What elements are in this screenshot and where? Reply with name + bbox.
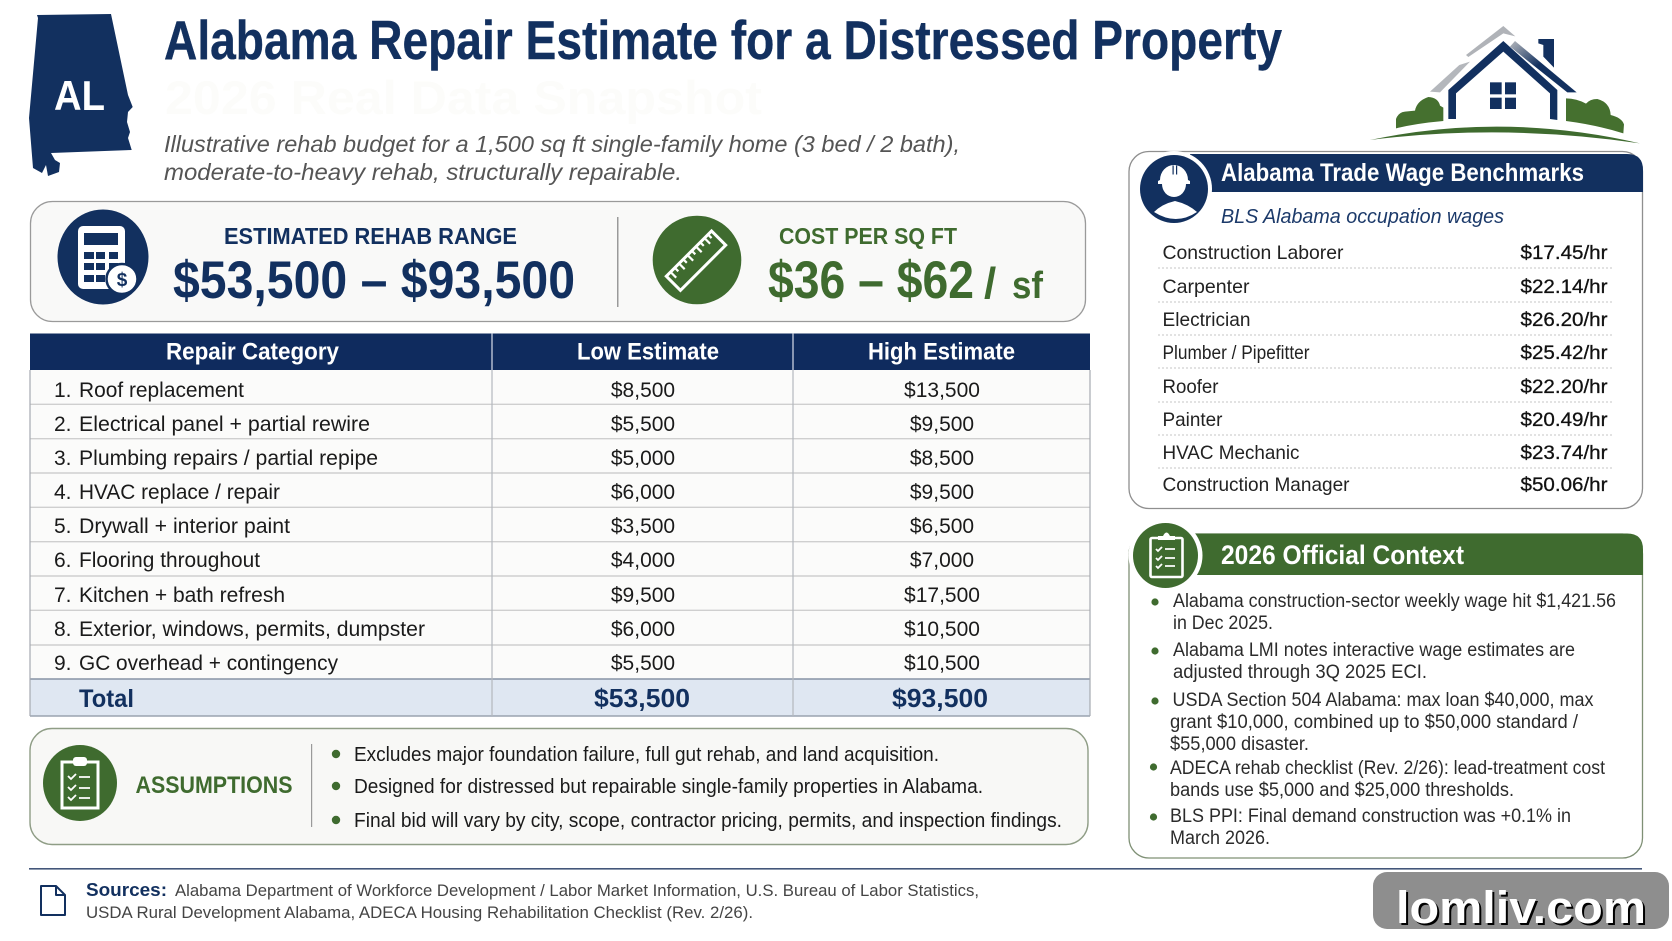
- assumptions list: Excludes major foundation failure, full gut rehab, and land acquisition.: [354, 744, 939, 766]
- watermark: lomliv.com: [1396, 882, 1646, 933]
- row 8: $6,000: [611, 618, 675, 641]
- row 4: HVAC replace / repair: [79, 481, 280, 504]
- icon: document: [41, 886, 65, 915]
- bullet: USDA: grant $10,000, combined up to $50,000 standard /: [1170, 712, 1579, 733]
- sources: USDA Rural Development Alabama, ADECA Housing Rehabilitation Checklist (Rev. 2/26).: [86, 903, 753, 922]
- wage: roofer: Roofer: [1162, 376, 1219, 398]
- wage: painter: [1162, 409, 1608, 431]
- row 3: $8,500: [910, 447, 974, 470]
- cost per sq ft value: sf: [1012, 265, 1043, 307]
- row 5: Drywall + interior paint: [79, 515, 290, 538]
- wage panel header: [1190, 154, 1643, 192]
- row 5: [54, 515, 974, 538]
- wage: plumber: Plumber / Pipefitter: [1162, 342, 1310, 364]
- assumptions list: [332, 744, 1062, 832]
- bullet: PPI: BLS PPI: Final demand construction was +0.1% in: [1170, 806, 1571, 827]
- cost per sq ft value: $36 – $62: [768, 251, 974, 310]
- wage: electrician: $26.20/hr: [1520, 309, 1608, 331]
- wage: HVAC mechanic: HVAC Mechanic: [1162, 442, 1300, 464]
- bullet: USDA: $55,000 disaster.: [1170, 734, 1309, 755]
- row 5: $6,500: [910, 515, 974, 538]
- wage: roofer: $22.20/hr: [1520, 376, 1608, 398]
- cost per sq ft label: COST PER SQ FT: [779, 223, 957, 249]
- wage: construction laborer: $17.45/hr: [1520, 242, 1608, 264]
- row 2: Electrical panel + partial rewire: [79, 413, 370, 436]
- wage: construction laborer: [1162, 242, 1608, 264]
- row 8: [54, 618, 980, 641]
- row 7: 7.: [54, 584, 72, 607]
- table header: High Estimate: [868, 338, 1015, 366]
- row 9: $10,500: [904, 652, 980, 675]
- row 9: GC overhead + contingency: [79, 652, 338, 675]
- wage: HVAC mechanic: $23.74/hr: [1520, 442, 1608, 464]
- total row: $53,500: [594, 683, 690, 713]
- row 1: $8,500: [611, 379, 675, 402]
- panel: Alabama trade wage benchmarks: [1129, 151, 1643, 508]
- bullet: ADECA: ADECA rehab checklist (Rev. 2/26): lead-treatment cost: [1170, 758, 1606, 779]
- wage: construction laborer: Construction Laborer: [1162, 242, 1344, 264]
- total row: $93,500: [892, 683, 988, 713]
- title: Alabama Repair Estimate for a Distressed Property: [164, 9, 1282, 71]
- bullet: ADECA: bands use $5,000 and $25,000 thresholds.: [1170, 780, 1514, 801]
- wage: plumber: [1162, 342, 1608, 364]
- row 3: 3.: [54, 447, 72, 470]
- icon: Alabama state silhouette with AL: [29, 14, 133, 176]
- table header: [30, 333, 1090, 370]
- row 7: $17,500: [904, 584, 980, 607]
- wage: electrician: [1162, 309, 1608, 331]
- wage: painter: Painter: [1162, 409, 1223, 431]
- bullet: weekly wage: in Dec 2025.: [1173, 613, 1273, 634]
- row 1: 1.: [54, 379, 72, 402]
- row 2: [54, 413, 974, 436]
- wage: carpenter: $22.14/hr: [1520, 276, 1608, 298]
- assumptions list: Designed for distressed but repairable single-family properties in Alabama.: [354, 776, 983, 798]
- icon: worker: [1136, 151, 1212, 227]
- row 1: [54, 379, 980, 402]
- wage: construction manager: Construction Manager: [1162, 474, 1350, 496]
- row 6: $7,000: [910, 549, 974, 572]
- row 7: [54, 584, 980, 607]
- faint subtitle: 2026 Real Data Snapshot: [165, 71, 762, 124]
- intro text: [164, 131, 960, 185]
- wage: roofer: [1162, 376, 1608, 398]
- row 6: Flooring throughout: [79, 549, 260, 572]
- row 4: 4.: [54, 481, 72, 504]
- range value: $53,500 – $93,500: [173, 251, 575, 310]
- wage: carpenter: [1162, 276, 1608, 298]
- row 2: $9,500: [910, 413, 974, 436]
- table header: Repair Category: [166, 338, 340, 366]
- watermark: [1373, 872, 1669, 933]
- row 2: 2.: [54, 413, 72, 436]
- wage: HVAC mechanic: [1162, 442, 1608, 464]
- wage: electrician: Electrician: [1162, 309, 1250, 331]
- wage: plumber: $25.42/hr: [1520, 342, 1608, 364]
- panel: estimated rehab range and cost per sq ft: [30, 202, 1086, 322]
- row 7: Kitchen + bath refresh: [79, 584, 285, 607]
- total row: Total: [79, 685, 134, 713]
- wage panel subtitle: BLS Alabama occupation wages: [1221, 206, 1504, 228]
- icon: house logo: [1370, 26, 1640, 143]
- row 6: $4,000: [611, 549, 675, 572]
- assumptions list: Final bid will vary by city, scope, contractor pricing, permits, and inspection findings.: [354, 810, 1062, 832]
- bullet: PPI: March 2026.: [1170, 828, 1270, 849]
- total row: [79, 683, 988, 713]
- row 4: [54, 481, 974, 504]
- context panel header: 2026 Official Context: [1221, 540, 1464, 570]
- icon: calculator: [58, 210, 148, 304]
- row 9: $5,500: [611, 652, 675, 675]
- row 5: $3,500: [611, 515, 675, 538]
- row 1: Roof replacement: [79, 379, 244, 402]
- panel: assumptions: [30, 728, 1088, 844]
- wage: carpenter: Carpenter: [1162, 276, 1250, 298]
- row 4: $6,000: [611, 481, 675, 504]
- row 1: $13,500: [904, 379, 980, 402]
- row 8: Exterior, windows, permits, dumpster: [79, 618, 425, 641]
- row 6: 6.: [54, 549, 72, 572]
- row 8: $10,500: [904, 618, 980, 641]
- wage: construction manager: [1162, 474, 1608, 496]
- row 9: 9.: [54, 652, 72, 675]
- bullet: USDA: [1151, 690, 1594, 755]
- icon: ruler: [653, 216, 741, 304]
- range label: ESTIMATED REHAB RANGE: [224, 223, 517, 249]
- row 7: $9,500: [611, 584, 675, 607]
- icon: assumptions clipboard: [43, 745, 117, 821]
- row 2: $5,500: [611, 413, 675, 436]
- bullet: LMI: adjusted through 3Q 2025 ECI.: [1173, 662, 1427, 683]
- assumptions heading: ASSUMPTIONS: [136, 772, 292, 799]
- table header: Low Estimate: [577, 338, 719, 366]
- row 8: 8.: [54, 618, 72, 641]
- row 3: $5,000: [611, 447, 675, 470]
- panel: 2026 official context: [1128, 518, 1643, 858]
- row 4: $9,500: [910, 481, 974, 504]
- sources: Sources:: [86, 880, 167, 900]
- row 3: Plumbing repairs / partial repipe: [79, 447, 378, 470]
- intro text: Illustrative rehab budget for a 1,500 sq ft single-family home (3 bed / 2 bath),: [164, 131, 960, 157]
- bullet: weekly wage: [1151, 591, 1616, 634]
- sources: [86, 880, 979, 922]
- intro text: moderate-to-heavy rehab, structurally repairable.: [164, 159, 682, 185]
- icon: context clipboard: [1128, 518, 1202, 592]
- cost per sq ft value: /: [984, 259, 996, 308]
- wage: painter: $20.49/hr: [1520, 409, 1608, 431]
- icon: Alabama state silhouette with AL: AL: [54, 72, 105, 119]
- wage panel header: Alabama Trade Wage Benchmarks: [1221, 159, 1584, 187]
- bullet: ADECA: [1150, 758, 1606, 801]
- context panel header: [1190, 534, 1643, 575]
- row 9: [54, 652, 980, 675]
- row 6: [54, 549, 974, 572]
- bullet: USDA: USDA Section 504 Alabama: max loan $40,000, max: [1172, 690, 1594, 711]
- bullet: LMI: [1151, 640, 1575, 683]
- row 5: 5.: [54, 515, 72, 538]
- bullet: weekly wage: Alabama construction-sector weekly wage hit $1,421.56: [1173, 591, 1616, 612]
- sources: Alabama Department of Workforce Development / Labor Market Information, U.S. Bureau of Labor Statistics,: [175, 881, 979, 900]
- bullet: PPI: [1150, 806, 1571, 849]
- table: repair categories: [30, 333, 1090, 716]
- wage: construction manager: $50.06/hr: [1520, 474, 1608, 496]
- bullet: LMI: Alabama LMI notes interactive wage estimates are: [1173, 640, 1575, 661]
- icon: calculator: $: [117, 270, 128, 291]
- row 3: [54, 447, 974, 470]
